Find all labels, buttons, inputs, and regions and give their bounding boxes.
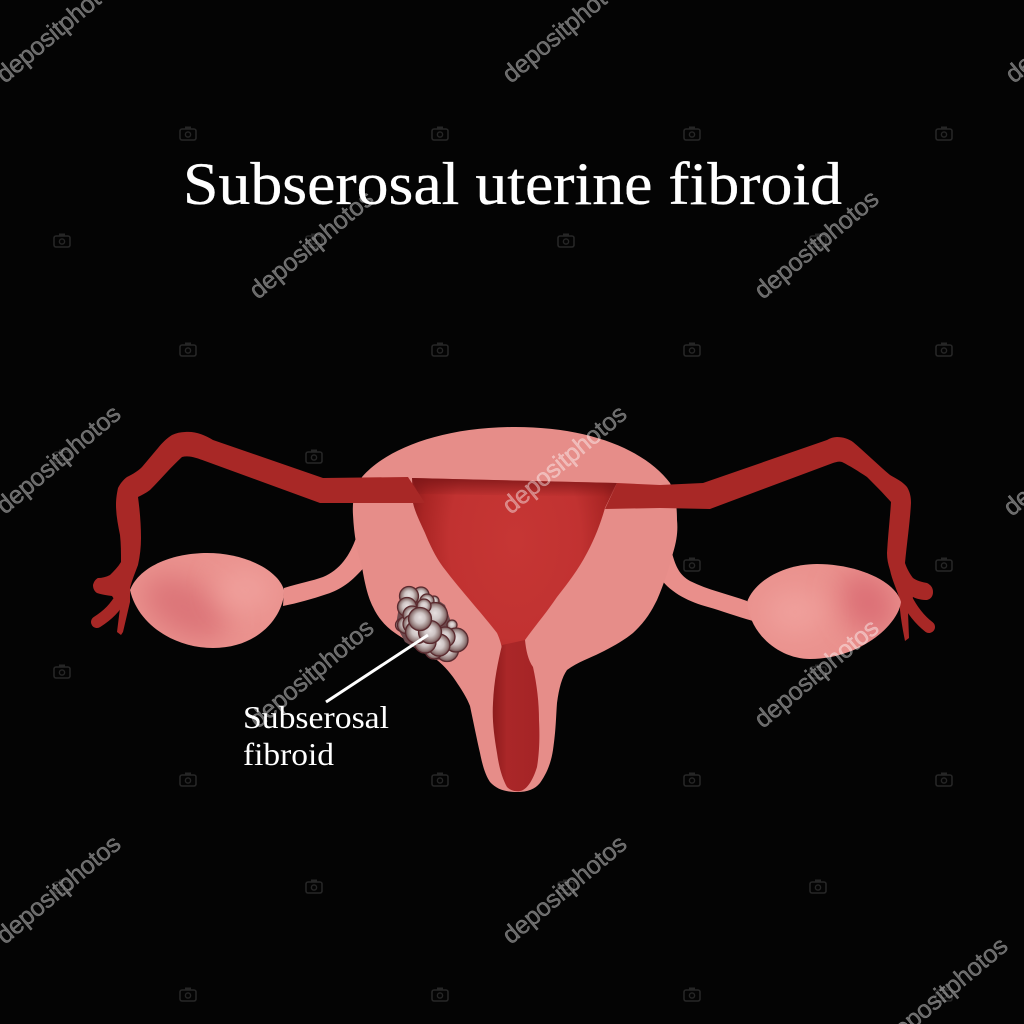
fibroid label: Subserosal bbox=[243, 699, 389, 735]
uterine cavity bbox=[412, 478, 617, 660]
watermark camera icons bbox=[54, 126, 952, 1001]
watermarks: depositphotos bbox=[244, 185, 379, 305]
right ovarian ligament bbox=[660, 553, 753, 621]
uterus body bbox=[353, 427, 677, 792]
left fallopian tube bbox=[93, 432, 425, 635]
left ovarian ligament bbox=[283, 538, 366, 606]
watermarks: depositphotos bbox=[749, 614, 884, 734]
watermarks: depositphotos bbox=[749, 185, 884, 305]
fibroid cluster bbox=[396, 586, 468, 662]
watermarks: depositphotos bbox=[244, 614, 379, 734]
leader line bbox=[326, 635, 428, 702]
watermarks: depositphotos bbox=[497, 400, 632, 520]
fibroid backing mass bbox=[396, 588, 465, 660]
anatomy diagram bbox=[93, 427, 933, 792]
right ovary bbox=[747, 561, 908, 659]
watermarks: depositphotos bbox=[497, 830, 632, 950]
cervical canal bbox=[493, 640, 539, 791]
title: Subserosal uterine fibroid bbox=[183, 151, 842, 217]
fibroid label bbox=[243, 699, 389, 772]
left ovary bbox=[130, 553, 284, 654]
fibroid label: fibroid bbox=[243, 736, 334, 772]
cavity top shadow bbox=[412, 478, 617, 497]
right fallopian tube bbox=[605, 437, 933, 641]
